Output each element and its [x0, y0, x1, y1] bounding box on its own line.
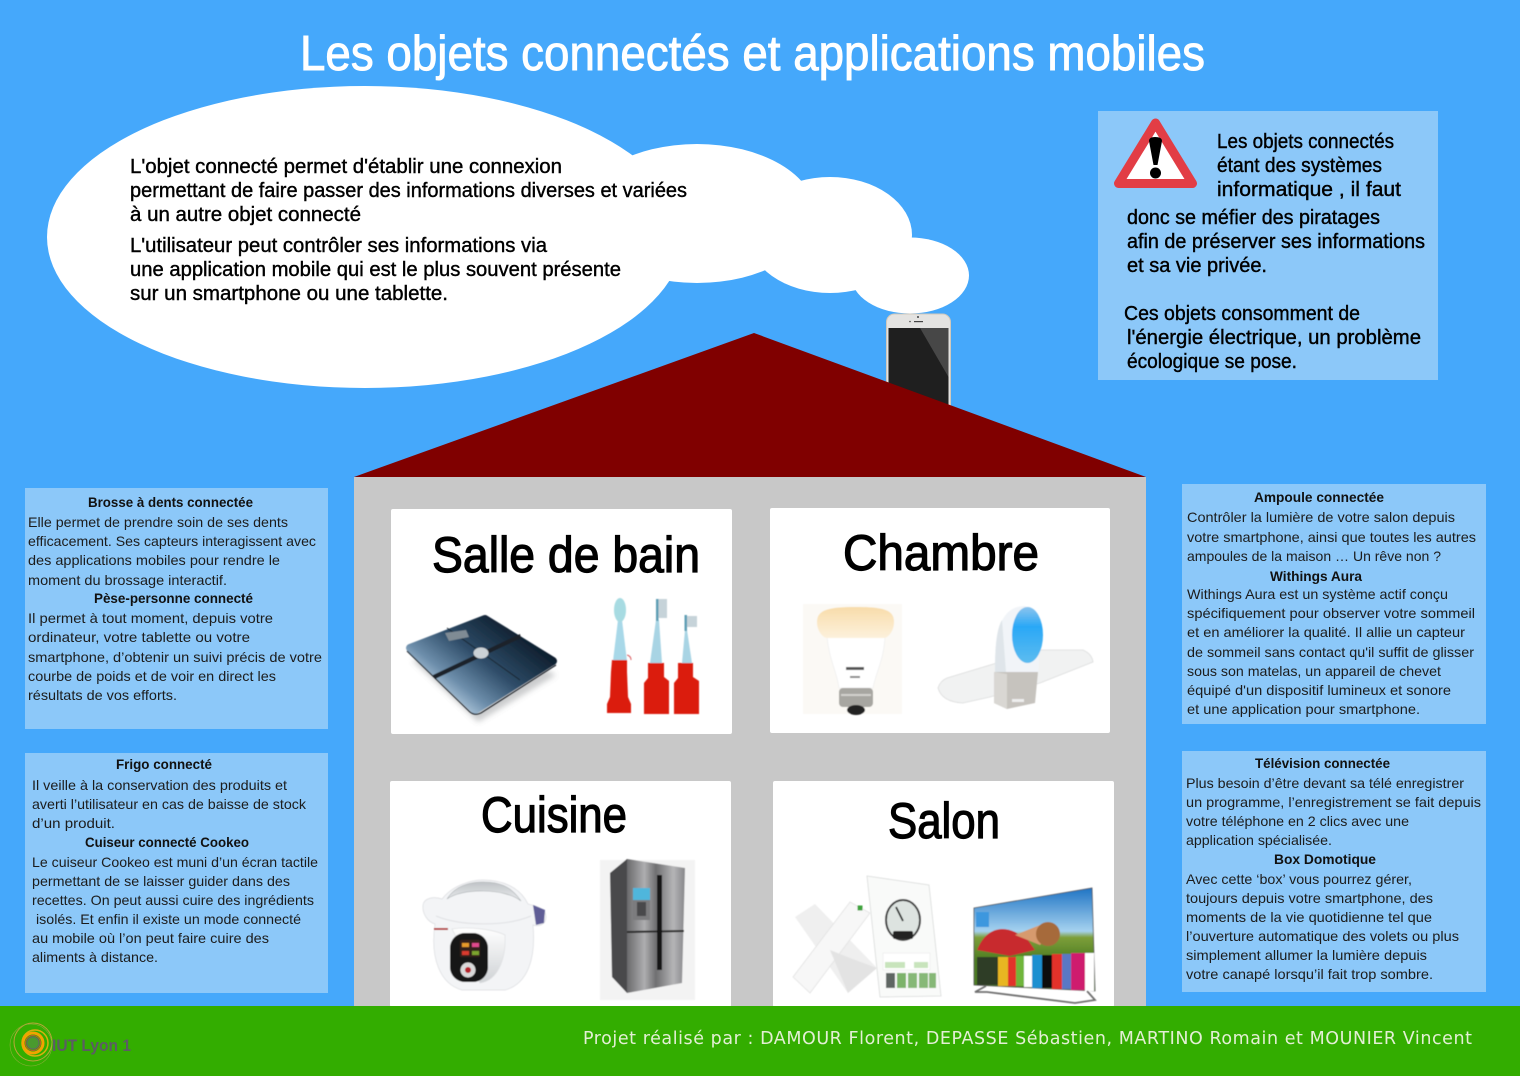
icon: withings aura — [938, 606, 1093, 709]
panel: télévision et box: application spécialisée. — [1186, 832, 1332, 848]
cloud text: L'objet connecté permet d'établir une connexion — [130, 156, 562, 178]
panel: brosse et pèse-personne: efficacement. Ses capteurs interagissent avec — [28, 533, 316, 549]
panel: brosse et pèse-personne: ordinateur, votre tablette ou votre — [28, 629, 250, 645]
panel: télévision et box: simplement allumer la lumière depuis — [1186, 947, 1427, 963]
icon: smart TV — [974, 888, 1095, 1003]
house roof — [354, 333, 1146, 477]
panel: télévision et box: l’ouverture automatique des volets ou plus — [1186, 928, 1459, 944]
warning text: Ces objets consomment de — [1124, 303, 1360, 325]
warning text: Les objets connectés — [1217, 131, 1394, 153]
warning text: informatique , il faut — [1217, 179, 1401, 201]
panel: brosse et pèse-personne: courbe de poids et de voir en direct les — [28, 668, 276, 684]
title: Les objets connectés et applications mobiles — [300, 27, 1205, 81]
panel: ampoule et aura: ampoules de la maison … Un rêve non ? — [1187, 548, 1441, 564]
heading: cuisine: Cuisine — [481, 787, 627, 843]
panel: télévision et box: votre canapé lorsqu’il fait trop sombre. — [1186, 966, 1433, 982]
icon: domotic box — [793, 902, 877, 993]
panel: frigo et cuiseur: aliments à distance. — [32, 949, 158, 965]
panel: ampoule et aura: et une application pour smartphone. — [1187, 701, 1420, 717]
warning text — [1124, 131, 1425, 373]
warning text: afin de préserver ses informations — [1127, 231, 1425, 253]
panel: ampoule et aura: Withings Aura est un système actif conçu — [1187, 586, 1448, 602]
panel: télévision et box: Avec cette ‘box’ vous pourrez gérer, — [1186, 871, 1412, 887]
panel: brosse et pèse-personne: Il permet à tout moment, depuis votre — [28, 610, 273, 626]
panel: télévision et box: moments de la vie quotidienne tel que — [1186, 909, 1432, 925]
panel: chambre — [770, 508, 1110, 733]
icon: connected toothbrushes — [607, 598, 699, 714]
icon: cookeo cooker — [423, 880, 546, 990]
panel: ampoule et aura: équipé d'un dispositif lumineux et sonore — [1187, 682, 1451, 698]
panel: brosse et pèse-personne: smartphone, d’obtenir un suivi précis de votre — [28, 649, 322, 665]
logo text: IUT Lyon 1 — [52, 1036, 131, 1055]
heading: chambre: Chambre — [843, 525, 1039, 581]
panel: brosse et pèse-personne: Brosse à dents connectée — [88, 494, 253, 510]
panel: frigo et cuiseur: d’un produit. — [32, 815, 115, 831]
panel: ampoule et aura: de sommeil sans contact qu'il suffit de glisser — [1187, 644, 1474, 660]
panel: brosse et pèse-personne: Pèse-personne connecté — [94, 590, 253, 606]
heading: salon: Salon — [888, 793, 1000, 849]
panel: brosse et pèse-personne: des applications mobiles pour rendre le — [28, 552, 280, 568]
panel: frigo et cuiseur: Cuiseur connecté Cookeo — [85, 834, 249, 850]
panel: ampoule et aura: Ampoule connectée — [1254, 489, 1384, 505]
panel: ampoule et aura: sous son matelas, un appareil de chevet — [1187, 663, 1441, 679]
footer band — [0, 1006, 1520, 1076]
warning text: donc se méfier des piratages — [1127, 207, 1380, 229]
cloud text: à un autre objet connecté — [130, 204, 361, 226]
panel: télévision et box — [1182, 751, 1486, 992]
panel: frigo et cuiseur: Il veille à la conservation des produits et — [32, 777, 287, 793]
panel: brosse et pèse-personne: résultats de vos efforts. — [28, 687, 177, 703]
cloud text — [130, 156, 687, 305]
cloud text: L'utilisateur peut contrôler ses informations via — [130, 235, 548, 257]
panel: ampoule et aura: Contrôler la lumière de votre salon depuis — [1187, 509, 1455, 525]
heading: salle de bain: Salle de bain — [432, 527, 700, 583]
panel: frigo et cuiseur: au mobile où l’on peut faire cuire des — [32, 930, 269, 946]
panel: frigo et cuiseur: isolés. Et enfin il existe un mode connecté — [36, 911, 301, 927]
warning text: étant des systèmes — [1217, 155, 1382, 177]
panel: frigo et cuiseur: Frigo connecté — [116, 756, 212, 772]
icon: warning triangle — [1118, 123, 1192, 184]
cloud text: permettant de faire passer des informations diverses et variées — [130, 180, 687, 202]
panel: télévision et box: toujours depuis votre smartphone, des — [1186, 890, 1433, 906]
icon: connected scale — [407, 619, 556, 722]
panel: télévision et box: Box Domotique — [1274, 851, 1376, 867]
panel: salle de bain — [391, 509, 732, 734]
panel: ampoule et aura: votre smartphone, ainsi que toutes les autres — [1187, 529, 1476, 545]
warning text: écologique se pose. — [1127, 351, 1297, 373]
cloud text: une application mobile qui est le plus souvent présente — [130, 259, 621, 281]
warning text: et sa vie privée. — [1127, 255, 1267, 277]
panel: cuisine — [390, 781, 731, 1007]
icon: connected bulb — [803, 604, 902, 715]
panel: frigo et cuiseur: permettant de se laisser guider dans des — [32, 873, 290, 889]
thought cloud — [47, 86, 969, 388]
warning panel — [1098, 111, 1438, 380]
panel: télévision et box: un programme, l’enregistrement se fait depuis — [1186, 794, 1481, 810]
cloud text: sur un smartphone ou une tablette. — [130, 283, 448, 305]
panel: télévision et box: Plus besoin d’être devant sa télé enregistrer — [1186, 775, 1464, 791]
footer credits: Projet réalisé par : DAMOUR Florent, DEPASSE Sébastien, MARTINO Romain et MOUNIER Vincent — [583, 1029, 1472, 1049]
panel: frigo et cuiseur — [25, 753, 328, 993]
panel: brosse et pèse-personne — [25, 488, 328, 729]
panel: salon — [773, 781, 1114, 1007]
panel: télévision et box: Télévision connectée — [1255, 755, 1390, 771]
house body — [354, 477, 1146, 1007]
icon: connected fridge — [600, 859, 695, 1000]
warning text: l'énergie électrique, un problème — [1127, 327, 1421, 349]
panel: ampoule et aura: Withings Aura — [1270, 568, 1362, 584]
icon: IUT logo — [10, 1023, 52, 1066]
panel: brosse et pèse-personne: moment du brossage interactif. — [28, 572, 227, 588]
panel: frigo et cuiseur: Le cuiseur Cookeo est muni d’un écran tactile — [32, 854, 318, 870]
panel: ampoule et aura — [1182, 484, 1486, 724]
icon: tablet with gauge — [867, 876, 941, 997]
icon: smartphone chimney — [886, 314, 950, 424]
panel: ampoule et aura: et en améliorer la qualité. Il allie un capteur — [1187, 624, 1465, 640]
panel: brosse et pèse-personne: Elle permet de prendre soin de ses dents — [28, 514, 288, 530]
panel: frigo et cuiseur: averti l’utilisateur en cas de baisse de stock — [32, 796, 307, 812]
panel: ampoule et aura: spécifiquement pour observer votre sommeil — [1187, 605, 1475, 621]
panel: frigo et cuiseur: recettes. On peut aussi cuire des ingrédients — [32, 892, 314, 908]
panel: télévision et box: votre téléphone en 2 clics avec une — [1186, 813, 1409, 829]
